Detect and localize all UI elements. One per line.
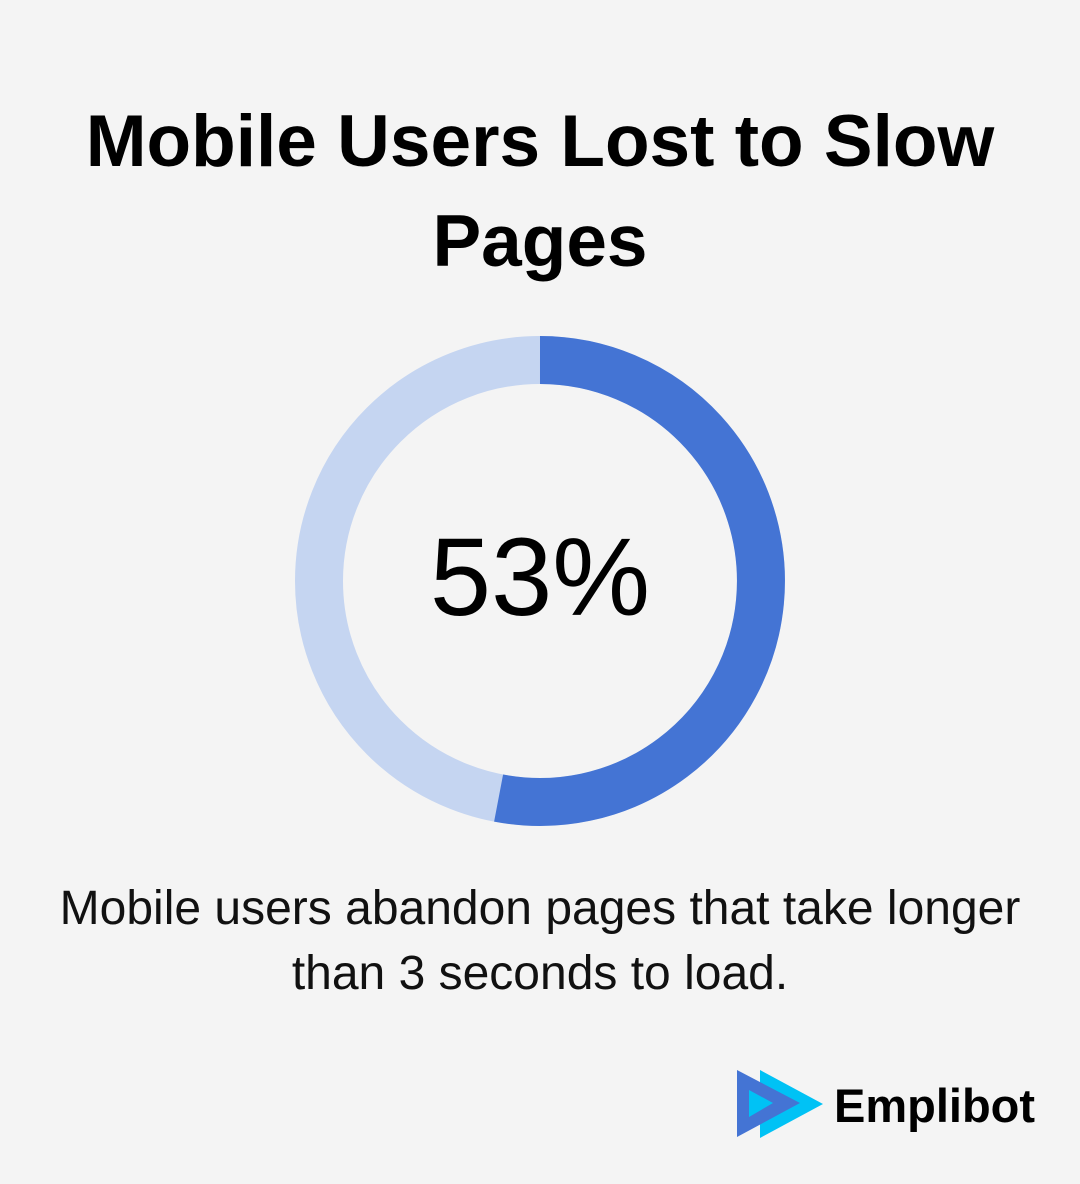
icon: play arrows: [737, 1070, 823, 1138]
caption: [60, 882, 1020, 1000]
center value: 53%: [430, 516, 650, 639]
brand name: Emplibot: [834, 1079, 1035, 1132]
logo: [737, 1070, 1035, 1138]
caption: Mobile users abandon pages that take longer: [60, 882, 1020, 935]
donut background ring: [319, 360, 761, 802]
title: [86, 101, 994, 282]
caption: than 3 seconds to load.: [292, 947, 788, 1000]
title: Pages: [432, 201, 648, 282]
title: Mobile Users Lost to Slow: [86, 101, 994, 182]
donut value arc 53%: [499, 360, 761, 802]
